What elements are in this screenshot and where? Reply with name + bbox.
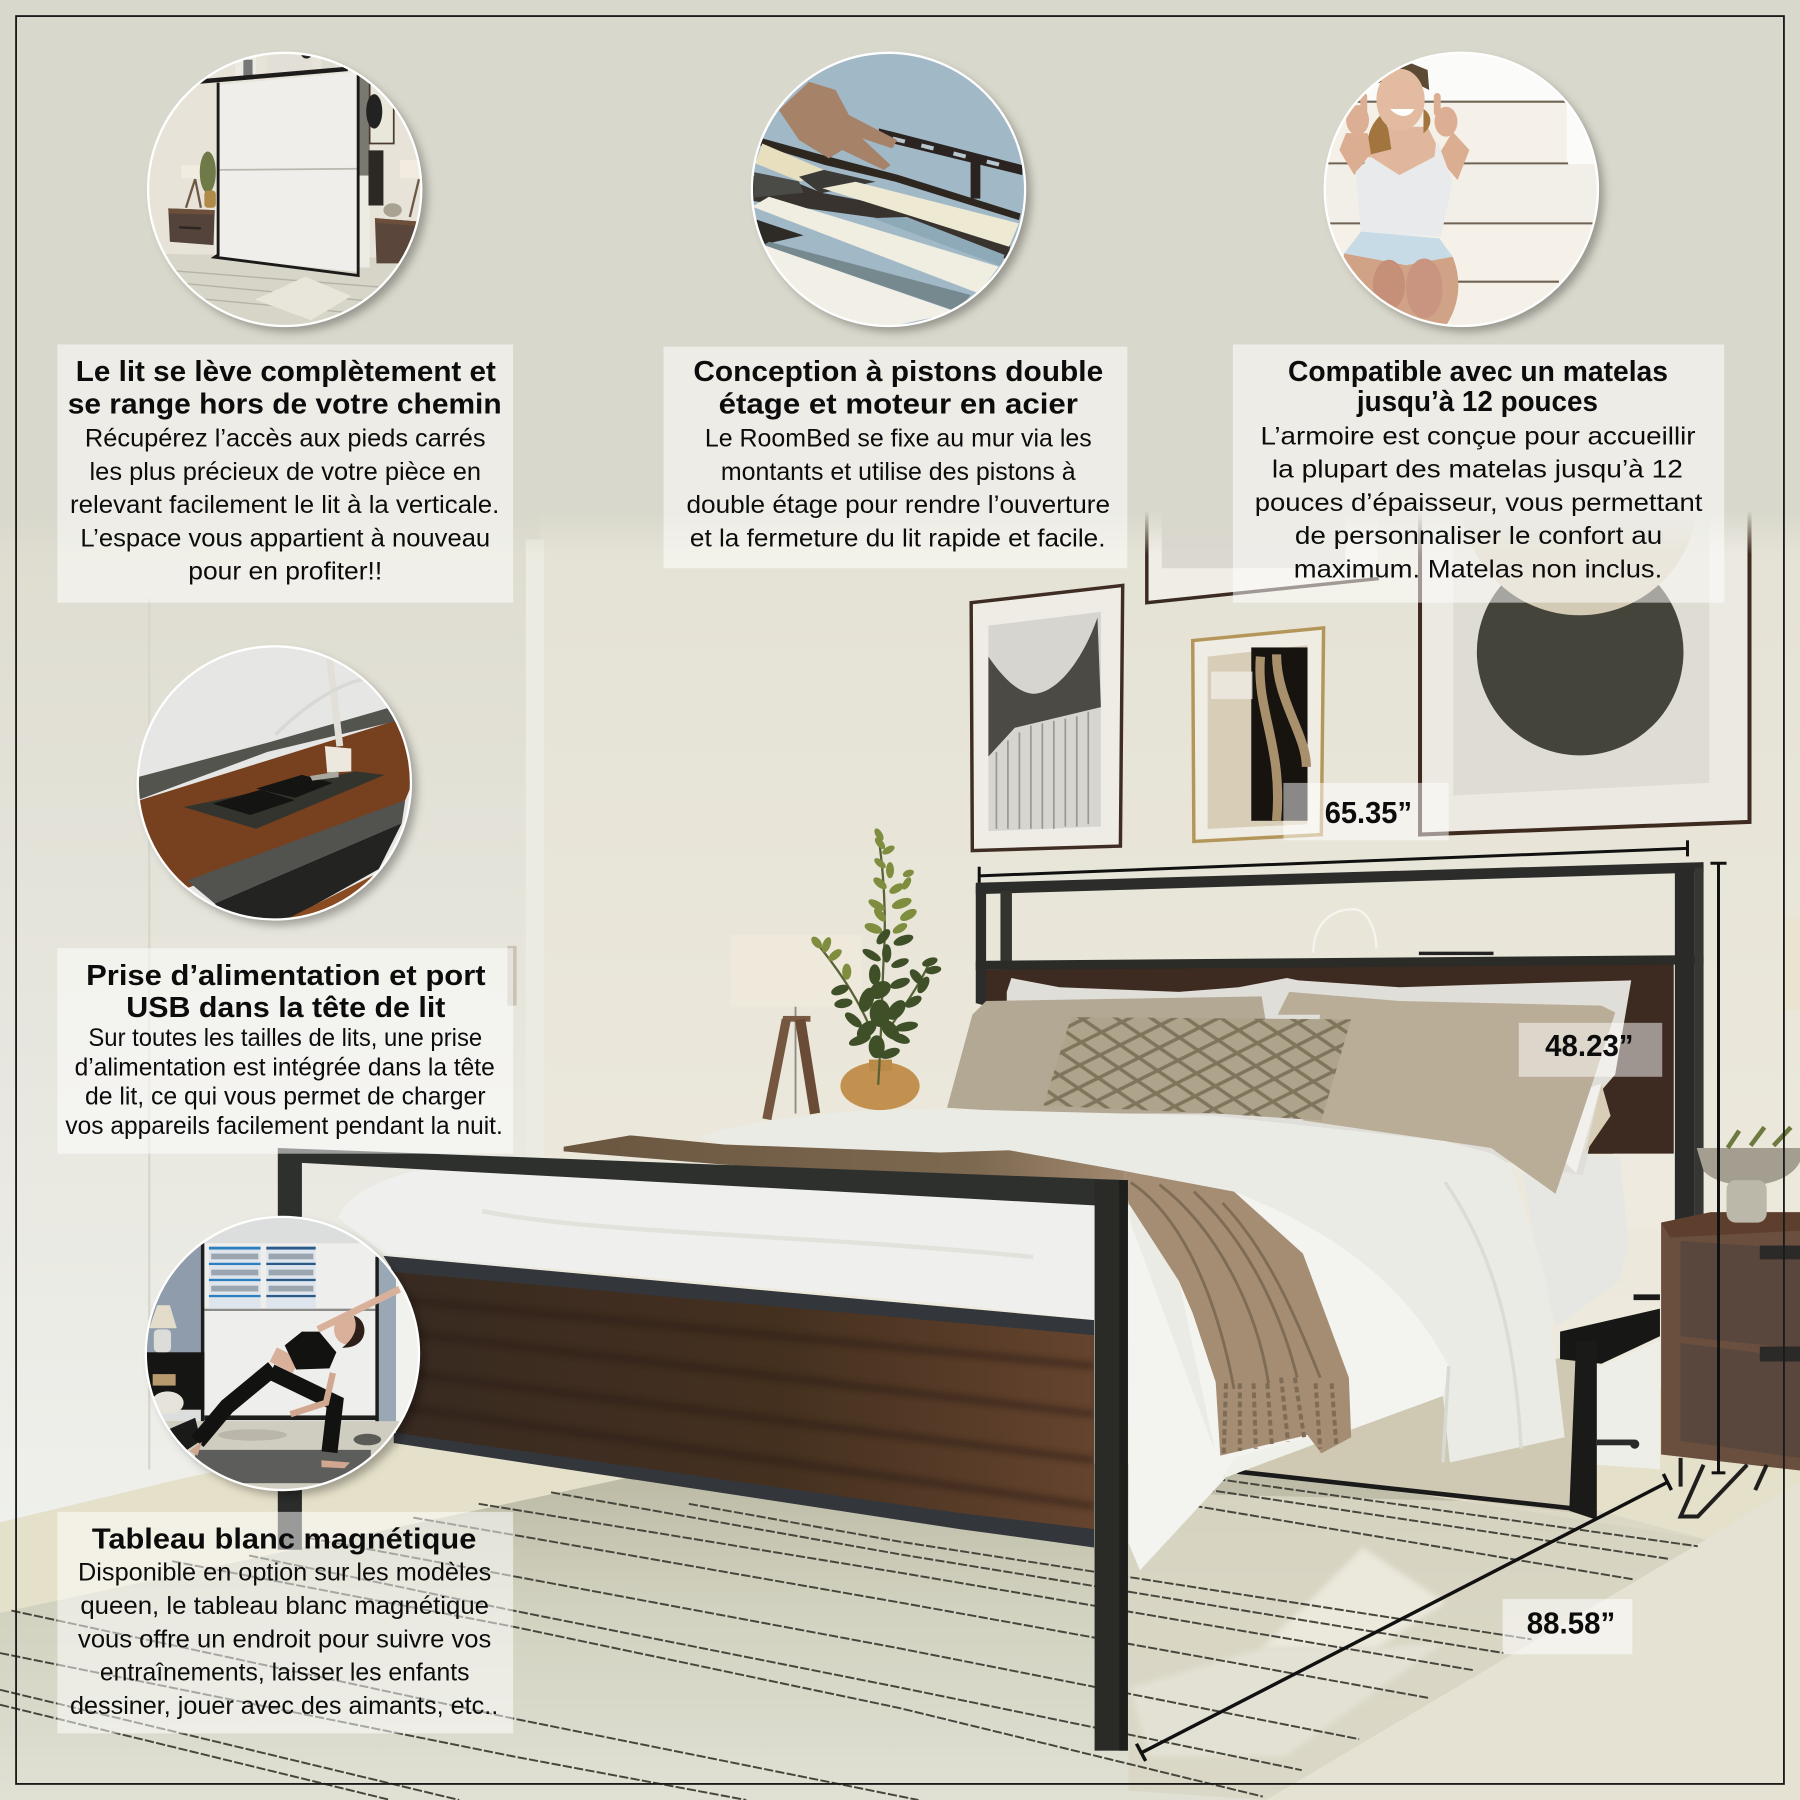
panel: pistons: Le RoomBed se fixe au mur via les <box>705 425 1092 453</box>
panel: tableau blanc <box>57 1512 513 1733</box>
beige pillows <box>947 992 1615 1194</box>
solid top panel with fade into photo <box>0 0 1800 554</box>
panel: lit se lève: Le lit se lève complètement et <box>76 356 496 388</box>
photo circle: power outlet in headboard <box>138 645 413 921</box>
panel: matelas: Compatible avec un matelas <box>1288 356 1668 388</box>
nightstand <box>1661 1212 1800 1516</box>
wall art: drip frame <box>971 585 1123 851</box>
wall art: frame partly hidden <box>1146 505 1379 604</box>
panel: matelas: de personnaliser le confort au <box>1295 522 1662 550</box>
panel: pistons: étage et moteur en acier <box>719 388 1078 420</box>
photo circle: woman stretching at whiteboard <box>145 1216 420 1496</box>
panel: matelas: maximum. Matelas non inclus. <box>1294 555 1662 583</box>
brown throw blanket <box>564 1135 1351 1456</box>
panel: lit se lève: pour en profiter!! <box>188 558 382 586</box>
dimension: length 88.58 <box>1136 1474 1671 1761</box>
panel: lit se lève <box>57 344 513 603</box>
panel: lit se lève: Récupérez l’accès aux pieds carrés <box>85 425 486 453</box>
panel: prise USB: de lit, ce qui vous permet de charger <box>85 1082 486 1110</box>
panel: tableau blanc: entraînements, laisser les enfants <box>100 1659 470 1687</box>
panel: lit se lève: se range hors de votre chemin <box>68 388 502 420</box>
panel: pistons: et la fermeture du lit rapide et facile. <box>690 524 1105 552</box>
wall art: large frame with dark circle <box>1419 379 1751 835</box>
dimension: height 48.23 <box>1519 863 1727 1473</box>
panel: prise USB: Prise d’alimentation et port <box>86 960 486 992</box>
headboard <box>976 862 1704 1224</box>
panel: matelas: pouces d’épaisseur, vous permettant <box>1255 489 1702 517</box>
back pillows <box>1007 978 1631 1176</box>
panel: pistons <box>664 347 1127 568</box>
photo circle: bed stowed vertically <box>147 47 422 327</box>
white duvet <box>339 1109 1565 1570</box>
wall below headboard <box>1613 1154 1674 1228</box>
rug with dashed stripes <box>0 1452 1706 1800</box>
panel: lit se lève: les plus précieux de votre pièce en <box>90 458 481 486</box>
panel: matelas <box>1233 344 1724 603</box>
panel: prise USB: Sur toutes les tailles de lits, une prise <box>88 1024 482 1052</box>
floor <box>0 1378 1800 1800</box>
panel: matelas: L’armoire est conçue pour accueillir <box>1260 422 1696 450</box>
panel: lit se lève: L’espace vous appartient à nouveau <box>80 524 490 552</box>
lamp shade at right edge <box>1785 918 1800 1010</box>
panel: tableau blanc: Tableau blanc magnétique <box>92 1524 476 1556</box>
panel: tableau blanc: vous offre un endroit pour suivre vos <box>78 1625 491 1653</box>
table lamp <box>731 935 862 1119</box>
stone vase on nightstand <box>1697 1127 1800 1223</box>
photo circle: woman on mattress <box>1324 52 1601 333</box>
photo circle: double-stage pistons <box>751 52 1026 328</box>
panel: prise USB <box>57 948 513 1154</box>
panel: tableau blanc: Disponible en option sur les modèles <box>78 1559 491 1587</box>
panel: prise USB: vos appareils facilement pendant la nuit. <box>65 1112 503 1140</box>
panel: lit se lève: relevant facilement le lit à la verticale. <box>70 491 499 519</box>
wall art: gold frame <box>1193 628 1324 841</box>
plant in amber vase <box>809 827 942 1110</box>
panel: prise USB: USB dans la tête de lit <box>126 992 446 1024</box>
panel: pistons: Conception à pistons double <box>693 356 1103 388</box>
patterned lumbar pillow <box>1043 1017 1351 1120</box>
under-bed frame <box>1238 1297 1660 1520</box>
dimension: width 65.35: 65.35” <box>1325 795 1412 830</box>
panel: matelas: la plupart des matelas jusqu’à 12 <box>1272 456 1683 484</box>
panel: pistons: montants et utilise des pistons à <box>721 458 1077 486</box>
panel: pistons: double étage pour rendre l’ouverture <box>686 491 1110 519</box>
dimension: height 48.23: 48.23” <box>1545 1028 1634 1063</box>
dimension: length 88.58: 88.58” <box>1527 1606 1615 1641</box>
mattress side <box>1519 1153 1629 1327</box>
panel: prise USB: d’alimentation est intégrée dans la tête <box>75 1054 495 1082</box>
panel: tableau blanc: queen, le tableau blanc magnétique <box>80 1592 489 1620</box>
footboard <box>278 1148 1128 1751</box>
panel: tableau blanc: dessiner, jouer avec des aimants, etc.. <box>70 1692 498 1720</box>
panel: matelas: jusqu’à 12 pouces <box>1356 386 1598 418</box>
dimension: width 65.35 <box>979 783 1688 883</box>
